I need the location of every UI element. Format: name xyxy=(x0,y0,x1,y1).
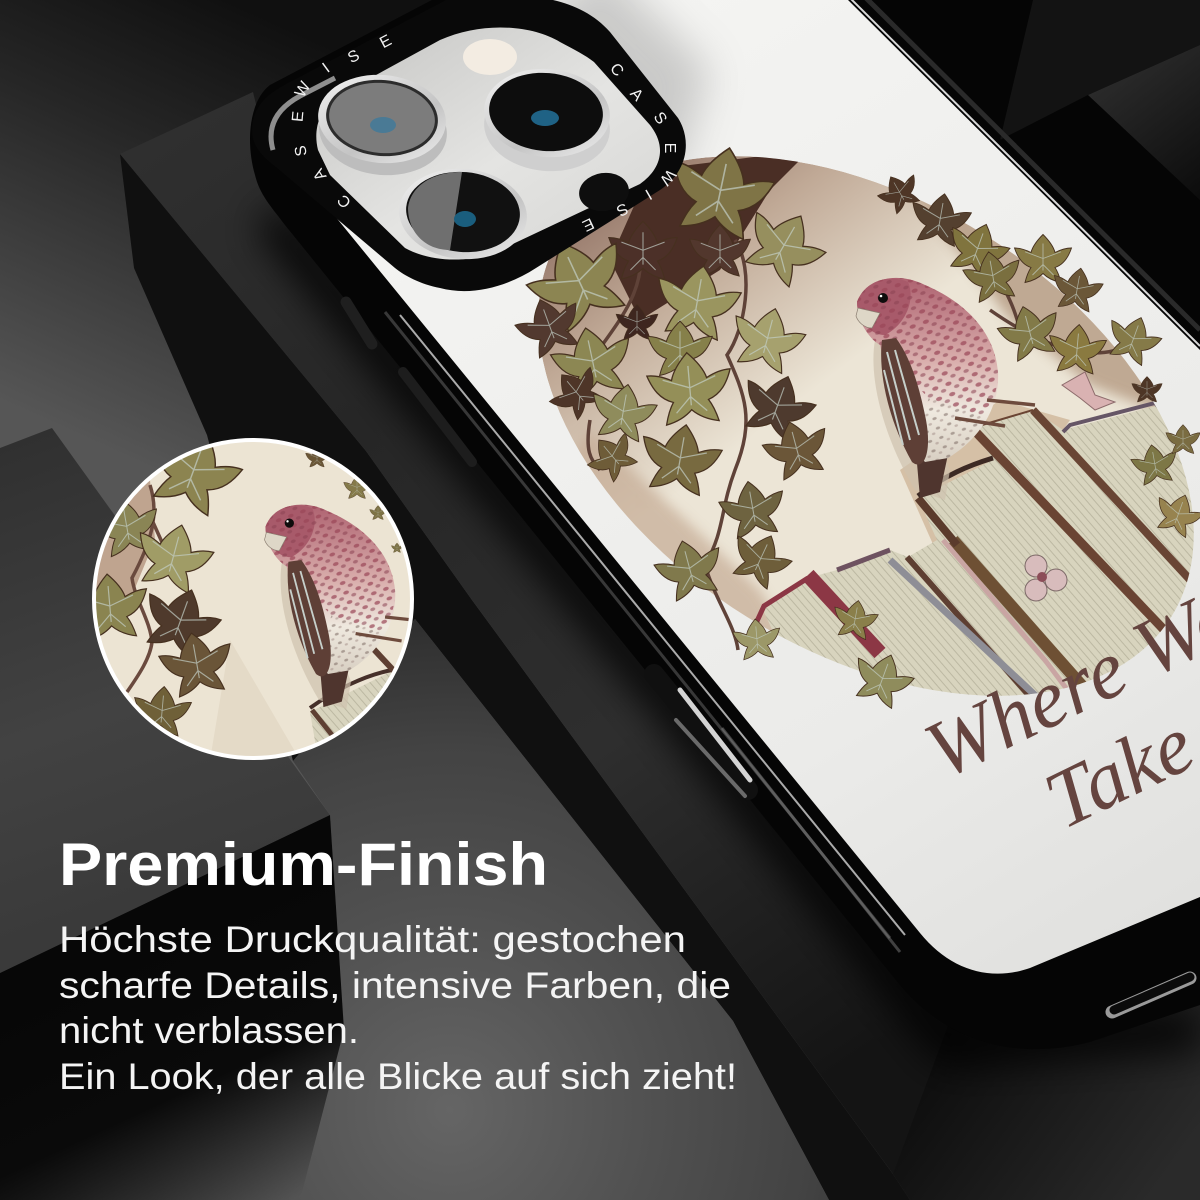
CASEWISE lettering left: E xyxy=(290,111,307,123)
faint upper right panel xyxy=(1000,0,1200,140)
zoom inset circle xyxy=(92,438,414,760)
CASEWISE lettering left: C xyxy=(334,191,355,211)
inset bird xyxy=(264,504,409,709)
CASEWISE lettering right: A xyxy=(626,85,646,105)
top right block xyxy=(1088,45,1200,200)
body text: Höchste Druckqualität: gestochen xyxy=(59,919,686,960)
CASEWISE lettering right: I xyxy=(642,185,654,202)
bird xyxy=(856,278,1035,500)
pink edged book xyxy=(907,557,1033,700)
lens top right xyxy=(480,64,614,176)
lens top left xyxy=(314,70,451,180)
book stack xyxy=(755,402,1194,696)
side button long xyxy=(403,372,472,462)
right book spine xyxy=(1033,410,1193,583)
camera bumper ring xyxy=(252,0,686,291)
top right black area xyxy=(700,0,1200,420)
CASEWISE lettering right: S xyxy=(650,109,670,128)
central lit wedge xyxy=(0,619,829,1200)
CASEWISE lettering left: S xyxy=(292,144,311,158)
CASEWISE lettering left: W xyxy=(292,78,315,101)
inset pale wash xyxy=(212,640,294,756)
ivy leaves right cluster xyxy=(830,166,1200,712)
inset circle border xyxy=(94,440,412,758)
CASEWISE lettering right: E xyxy=(579,214,596,234)
phone xyxy=(250,0,1200,1049)
right rim xyxy=(846,0,1200,346)
CASEWISE lettering left: A xyxy=(310,165,330,183)
power button chrome xyxy=(654,674,750,796)
phone contact shadow xyxy=(270,215,1200,1045)
body text: nicht verblassen. xyxy=(59,1010,359,1051)
ivy leaves left cluster xyxy=(510,137,835,661)
phone case body xyxy=(250,0,1200,1049)
brown wash behind stack xyxy=(900,402,1070,543)
body text: Ein Look, der alle Blicke auf sich zieht! xyxy=(59,1056,737,1097)
body text: scharfe Details, intensive Farben, die xyxy=(59,965,731,1006)
CASEWISE lettering left: I xyxy=(320,60,333,77)
CASEWISE lettering right xyxy=(579,60,679,234)
lens bottom xyxy=(395,164,531,264)
plinth dark face xyxy=(120,154,910,1200)
CASEWISE lettering right: W xyxy=(656,166,679,189)
middle book spine xyxy=(953,540,1083,687)
CASEWISE lettering left: E xyxy=(377,32,395,52)
small red book xyxy=(808,575,880,653)
camera glass window xyxy=(316,27,660,260)
inset vine xyxy=(126,484,163,693)
dark wash behind top ivy xyxy=(615,156,798,316)
CASEWISE lettering right: S xyxy=(613,199,631,219)
flower on book xyxy=(1025,555,1067,601)
CASEWISE lettering right: E xyxy=(661,143,678,153)
floor bottom right xyxy=(893,980,1200,1200)
CASEWISE lettering left: S xyxy=(345,47,363,67)
heading: Premium-Finish xyxy=(59,831,548,898)
inset brown wash xyxy=(95,480,155,600)
grey edged book xyxy=(890,560,1037,697)
CASEWISE lettering left xyxy=(290,32,395,211)
tall book spine xyxy=(972,428,1167,633)
bottom port xyxy=(1112,977,1190,1012)
body text xyxy=(59,919,737,1097)
camera island xyxy=(252,0,686,291)
black shadow triangle xyxy=(0,815,344,1200)
inset book xyxy=(310,672,392,743)
far right book top xyxy=(1063,403,1180,432)
page block xyxy=(764,406,1194,696)
camera island shadow on print xyxy=(554,0,720,160)
blossom top right xyxy=(1062,372,1115,410)
left rim gloss xyxy=(400,315,905,935)
brown wash behind right ivy xyxy=(915,200,1159,412)
plinth top surface xyxy=(120,92,985,1200)
phone print surface xyxy=(330,0,1200,974)
flash xyxy=(463,39,517,75)
microphone hole xyxy=(577,170,631,214)
lower left block xyxy=(0,428,330,973)
clear rim band xyxy=(271,78,335,150)
side button small xyxy=(346,302,372,344)
lower left wash xyxy=(575,433,778,636)
vines xyxy=(588,240,1130,650)
middle book top xyxy=(918,458,993,496)
tall book top edge xyxy=(982,409,1033,426)
CASEWISE lettering right: C xyxy=(606,60,627,80)
artwork: ivy, bird and books in an oval xyxy=(514,147,1200,710)
